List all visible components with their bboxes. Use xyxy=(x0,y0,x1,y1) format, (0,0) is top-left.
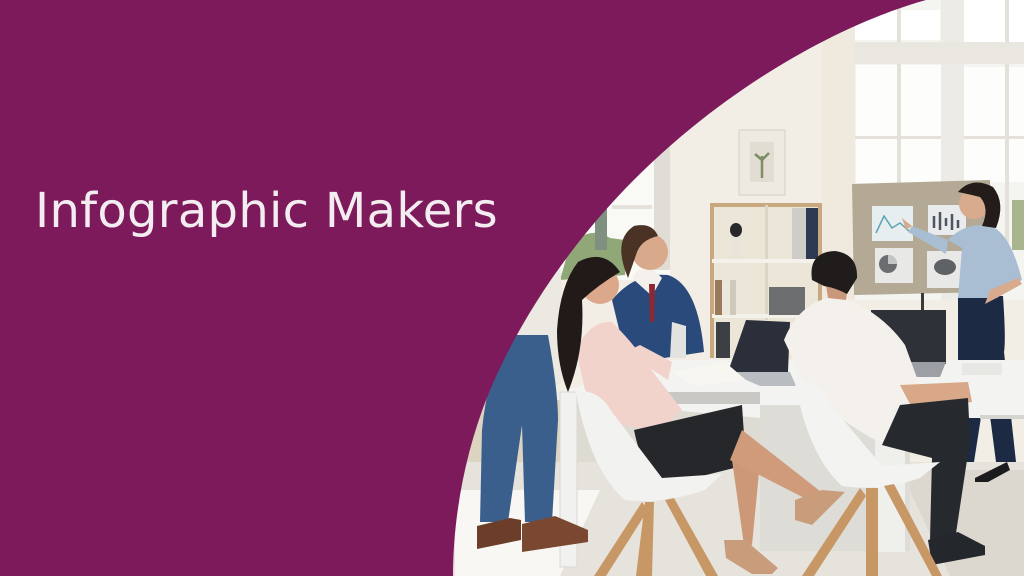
seated man in white shirt xyxy=(784,251,985,565)
white chair left xyxy=(576,391,722,576)
large window top right xyxy=(855,0,1024,300)
title: Infographic Makers xyxy=(35,183,498,239)
seated man in navy sweater xyxy=(612,225,704,358)
presentation board with charts xyxy=(852,180,990,313)
standing man in jeans xyxy=(477,258,588,552)
small window left with plants xyxy=(555,130,670,280)
presenter woman xyxy=(902,183,1022,482)
white chair right xyxy=(795,381,942,576)
framed picture xyxy=(739,130,785,195)
bookshelf xyxy=(710,203,822,358)
office wall and floor xyxy=(440,0,1024,576)
seated woman in pink blouse xyxy=(557,257,845,574)
meeting table with laptops xyxy=(560,310,1024,567)
